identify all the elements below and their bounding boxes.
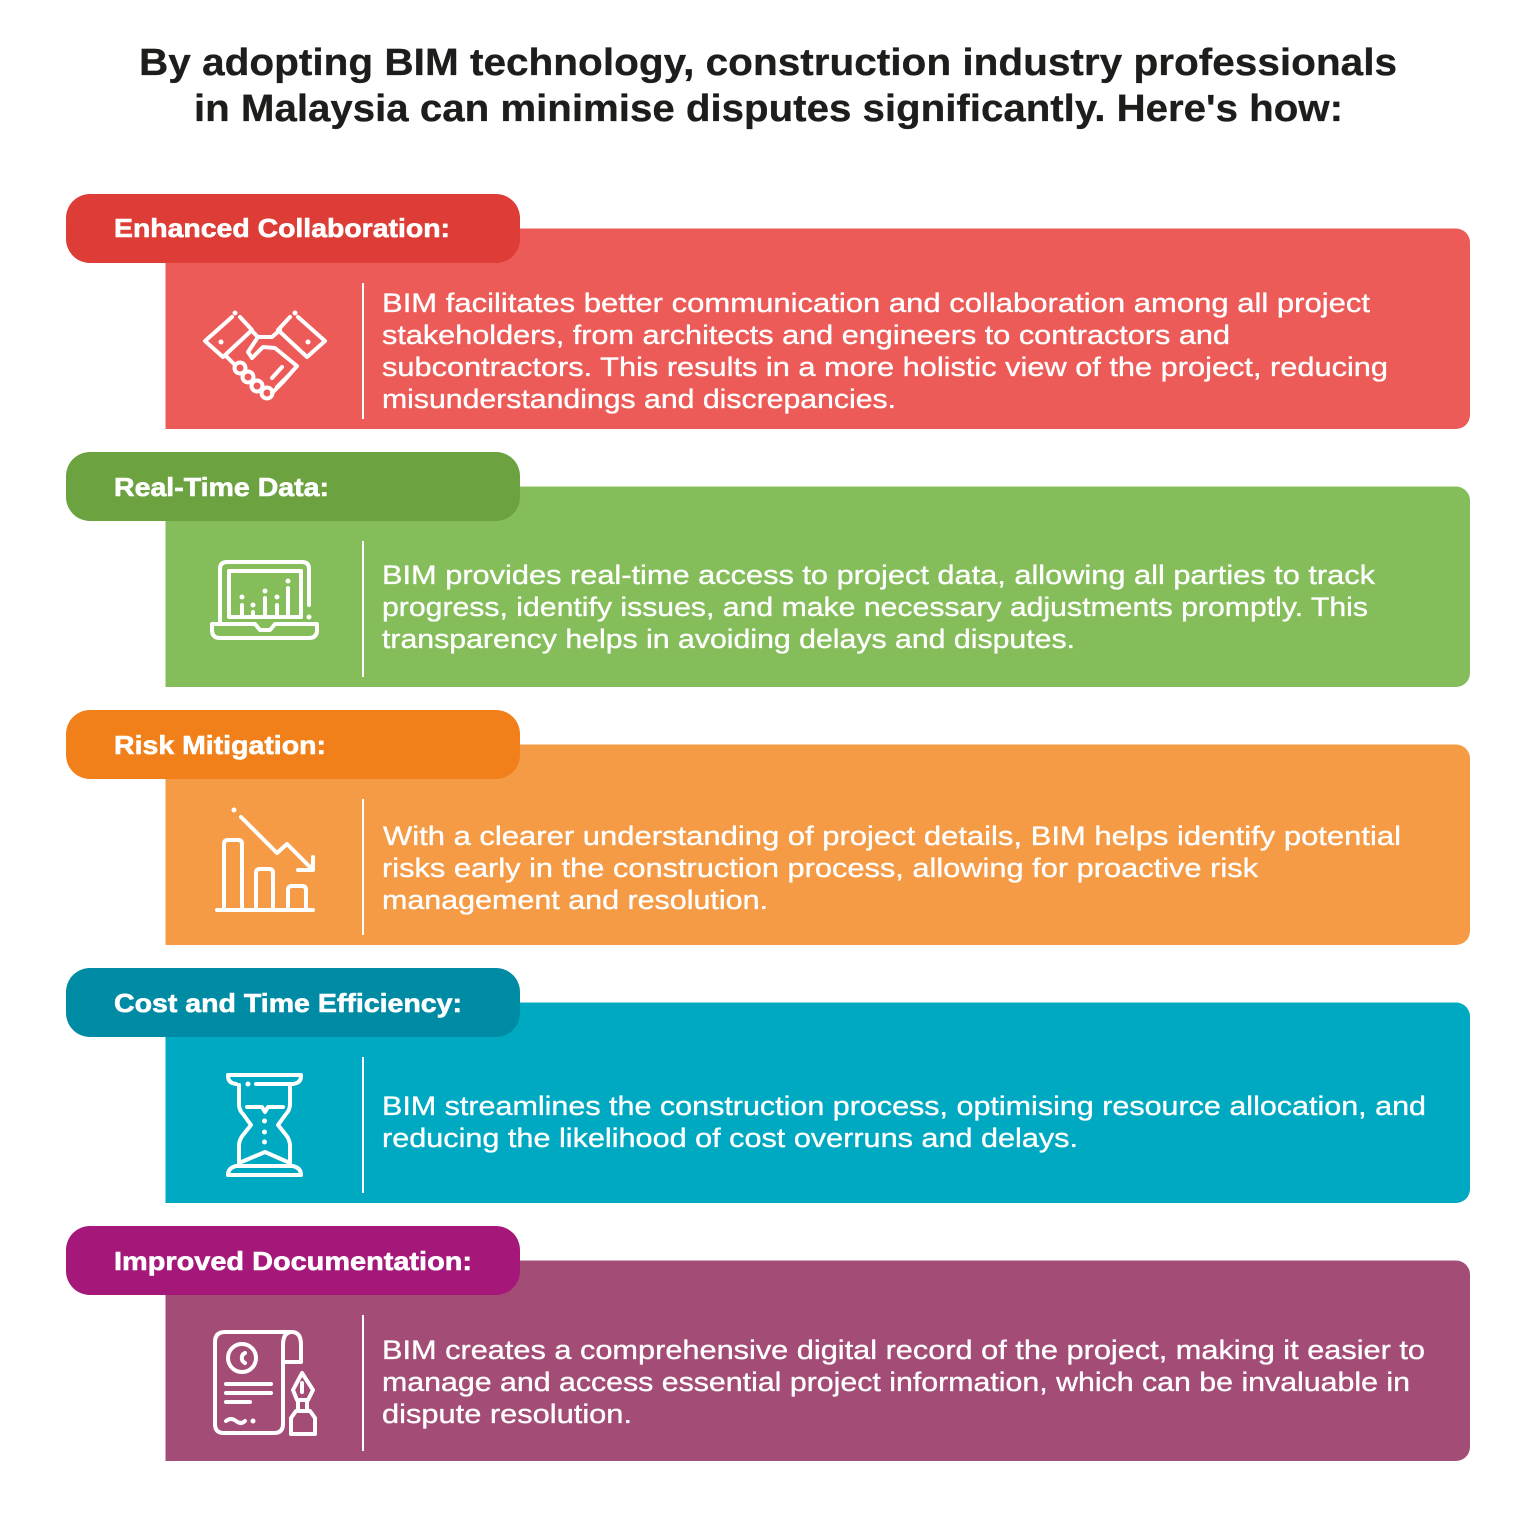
title [139,42,1397,130]
panel background [166,228,1470,429]
body text: manage and access essential project information, which can be invaluable in [382,1367,1410,1397]
body text: BIM creates a comprehensive digital record of the project, making it easier to [382,1335,1425,1365]
icon: handshake [205,310,325,398]
body text: transparency helps in avoiding delays and disputes. [382,624,1075,654]
heading: Improved Documentation: [114,1246,472,1276]
icon: document and pen [215,1332,315,1434]
body text [382,560,1376,654]
body text: risks early in the construction process, allowing for proactive risk [382,853,1259,883]
heading: Real-Time Data: [114,472,329,502]
heading: Risk Mitigation: [114,730,326,760]
body text: reducing the likelihood of cost overruns and delays. [382,1123,1078,1153]
header tab [66,710,520,779]
header tab [66,968,520,1037]
body text: management and resolution. [382,885,768,915]
heading: Enhanced Collaboration: [114,213,450,243]
body text: BIM facilitates better communication and collaboration among all project [382,288,1371,318]
panel background [166,486,1470,687]
body text [382,288,1388,414]
body text: stakeholders, from architects and engineers to contractors and [382,320,1230,350]
heading: Cost and Time Efficiency: [114,988,462,1018]
panel: improved documentation [66,1226,1470,1461]
body text: misunderstandings and discrepancies. [382,384,896,414]
title: in Malaysia can minimise disputes significantly. Here's how: [194,88,1343,130]
panel: enhanced collaboration [66,194,1470,429]
header tab [66,1226,520,1295]
body text: BIM streamlines the construction process, optimising resource allocation, and [382,1091,1426,1121]
body text: BIM provides real-time access to project data, allowing all parties to track [382,560,1376,590]
body text: subcontractors. This results in a more holistic view of the project, reducing [382,352,1388,382]
body text: progress, identify issues, and make necessary adjustments promptly. This [382,592,1368,622]
icon: laptop with chart [212,562,317,638]
icon: falling bar chart [217,808,313,910]
body text [382,821,1401,915]
title: By adopting BIM technology, construction industry professionals [139,42,1397,84]
panel: cost and time efficiency [66,968,1470,1203]
body text [382,1335,1425,1429]
panel background [166,1002,1470,1203]
body text [382,1091,1426,1153]
header tab [66,194,520,263]
panel background [166,1260,1470,1461]
icon: hourglass [228,1075,301,1175]
panel: risk mitigation [66,710,1470,945]
body text: With a clearer understanding of project details, BIM helps identify potential [383,821,1401,851]
panel: real-time data [66,452,1470,687]
body text: dispute resolution. [382,1399,632,1429]
header tab [66,452,520,521]
panel background [166,744,1470,945]
